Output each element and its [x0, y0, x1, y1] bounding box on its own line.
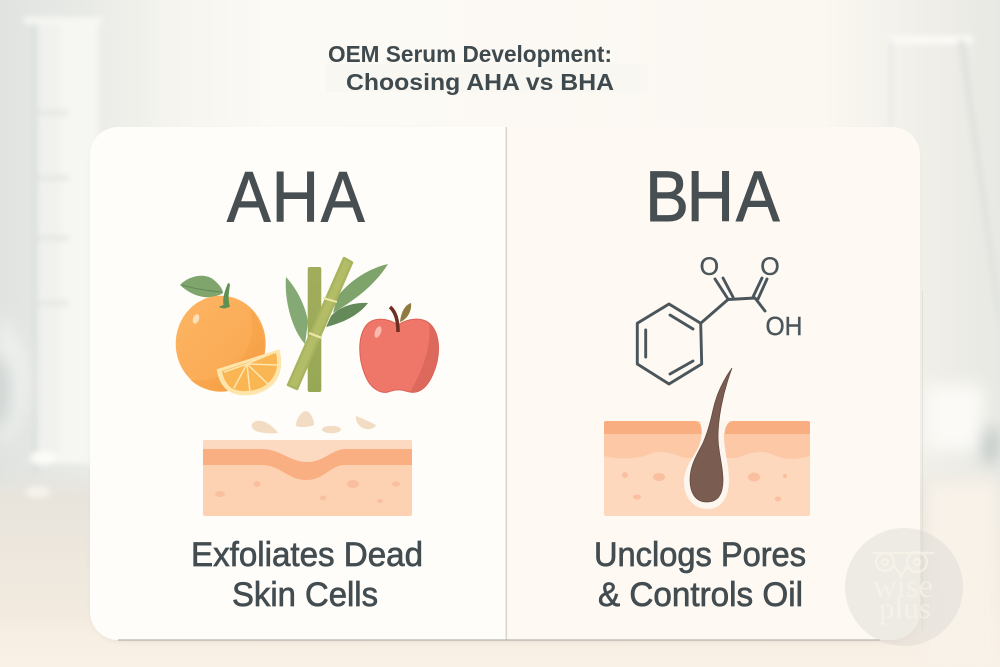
icon: sugarcane: [286, 258, 388, 392]
title: [326, 41, 648, 95]
watermark: Wise Plus logo: plus: [879, 592, 931, 625]
caption: BHA benefit: Unclogs Pores: [594, 536, 806, 574]
title: OEM Serum Development:: [328, 41, 612, 67]
icon: phenylglyoxylic acid molecule: [637, 253, 802, 384]
panel: BHA: [594, 158, 810, 614]
icon: phenylglyoxylic acid molecule: O: [700, 253, 719, 281]
panel: comparison card: [90, 127, 923, 641]
caption: AHA benefit: Skin Cells: [232, 576, 378, 614]
icon: skin cross-section: [203, 440, 412, 516]
caption: BHA benefit: [594, 536, 806, 614]
watermark: Wise Plus logo: [845, 528, 963, 646]
heading: BHA: BHA: [645, 158, 780, 237]
panel: AHA: [176, 158, 439, 614]
watermark: Wise Plus logo: wise: [873, 569, 933, 605]
title: Choosing AHA vs BHA: [346, 69, 614, 95]
icon: apple: [360, 303, 439, 392]
caption: AHA benefit: [191, 536, 423, 614]
caption: BHA benefit: & Controls Oil: [598, 576, 803, 614]
icon: dead skin flakes: [252, 411, 376, 433]
icon: orange with slice: [176, 276, 281, 395]
caption: AHA benefit: Exfoliates Dead: [191, 536, 423, 574]
heading: AHA: AHA: [227, 158, 365, 237]
icon: phenylglyoxylic acid molecule: OH: [766, 311, 802, 341]
icon: phenylglyoxylic acid molecule: O: [760, 253, 780, 281]
icon: skin cross-section with clogged pore: [604, 368, 810, 516]
